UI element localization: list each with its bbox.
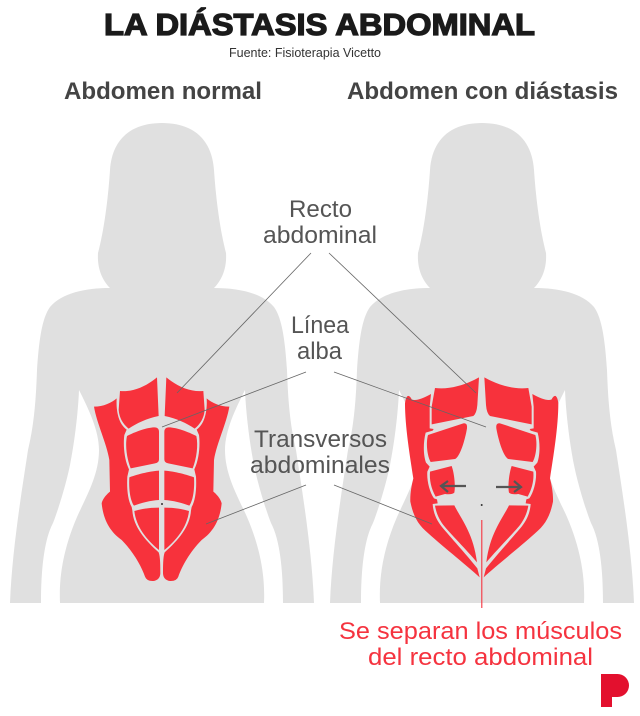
label: línea alba: alba [297, 338, 343, 365]
callout: red caption: Se separan los músculos [339, 618, 622, 645]
label: línea alba [291, 312, 350, 365]
heading: abdomen normal: Abdomen normal [64, 78, 262, 105]
label: recto abdominal: abdominal [263, 222, 377, 249]
callout: red caption: del recto abdominal [368, 644, 593, 671]
label: transversos abdominales [250, 426, 390, 479]
label: transversos abdominales: abdominales [250, 452, 390, 479]
arrow: left [441, 481, 466, 492]
icon: publisher logo P [601, 674, 629, 707]
label: transversos abdominales: Transversos [254, 426, 387, 453]
label: recto abdominal [263, 196, 377, 249]
arrow: right [496, 481, 521, 492]
red separation line [481, 520, 483, 608]
label: línea alba: Línea [291, 312, 350, 339]
silhouette: normal [10, 123, 314, 603]
source line: Fuente: Fisioterapia Vicetto [229, 45, 381, 60]
heading: abdomen con diástasis: Abdomen con diástasis [347, 78, 618, 105]
figure: abdomen with diastasis [330, 123, 634, 608]
title: LA DIÁSTASIS ABDOMINAL [104, 7, 535, 42]
leader lines [162, 253, 486, 524]
right separated muscle group [484, 377, 558, 577]
navel [481, 504, 483, 506]
navel [161, 503, 163, 505]
muscles: normal [94, 377, 229, 581]
silhouette: diastasis [330, 123, 634, 603]
label: recto abdominal: Recto [289, 196, 352, 223]
right muscle group [163, 377, 229, 581]
muscles: diastasis [405, 377, 558, 577]
callout: red caption [339, 618, 622, 671]
left separated muscle group [405, 377, 480, 577]
figure: normal abdomen [10, 123, 314, 603]
left muscle group [94, 377, 160, 581]
